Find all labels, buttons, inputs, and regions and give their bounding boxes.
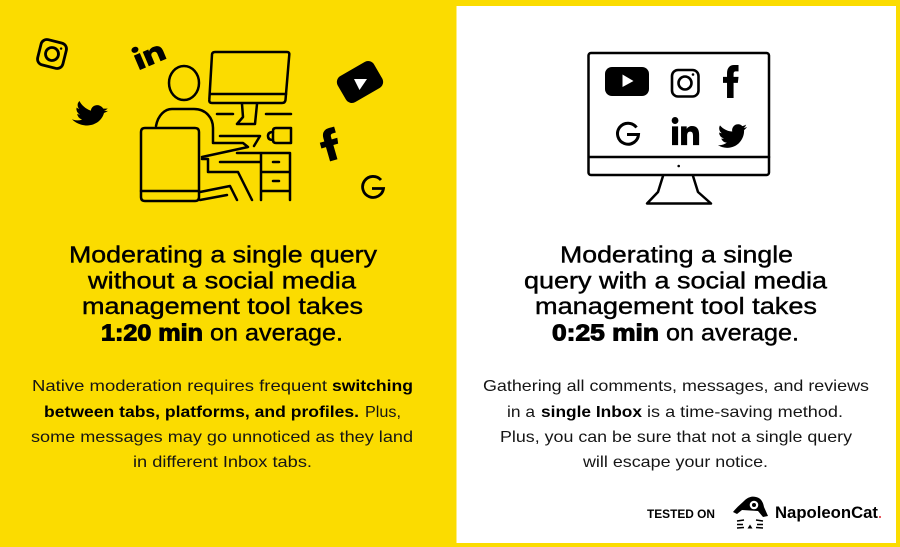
heading: without a tool: management tool takes	[82, 293, 363, 319]
text block: with a tool: in a	[507, 404, 535, 421]
text block: without a tool: Plus,	[365, 404, 401, 421]
icon: desktop monitor with social icons	[588, 53, 769, 204]
icon: facebook	[317, 127, 343, 163]
logo: NapoleonCat	[733, 497, 881, 528]
text block: with a tool: Gathering all comments, messages, and reviews	[483, 378, 869, 395]
heading: without a tool: without a social media	[87, 268, 356, 294]
text block: without a tool	[31, 378, 413, 471]
text block: without a tool: switching	[332, 378, 413, 395]
heading: with a tool: on average.	[666, 320, 799, 346]
text block: with a tool: will escape your notice.	[582, 454, 768, 471]
text block: with a tool: single Inbox	[541, 404, 642, 421]
heading: without a tool: on average.	[210, 320, 343, 346]
text block: without a tool: some messages may go unnoticed as they land	[31, 429, 413, 446]
heading: without a tool: Moderating a single query	[69, 242, 378, 268]
icon: google	[363, 176, 384, 197]
text block: without a tool: in different Inbox tabs.	[133, 454, 312, 471]
heading: with a tool: query with a social media	[524, 268, 827, 294]
heading: with a tool	[524, 242, 827, 346]
icon: twitter	[71, 99, 109, 131]
text block: without a tool: Native moderation requires frequent	[32, 378, 328, 395]
text block: with a tool: Plus, you can be sure that not a single query	[500, 429, 852, 446]
heading: without a tool: 1:20 min	[101, 320, 203, 346]
icon: youtube	[334, 59, 386, 105]
illustration: person working at a desk	[141, 52, 291, 201]
text block: with a tool	[483, 378, 869, 471]
heading: with a tool: Moderating a single	[560, 242, 793, 268]
heading: without a tool	[69, 242, 378, 346]
label: tested on: TESTED ON	[647, 507, 715, 521]
heading: with a tool: management tool takes	[535, 293, 817, 319]
logo: NapoleonCat: NapoleonCat	[775, 503, 878, 522]
text block: with a tool: is a time-saving method.	[647, 404, 843, 421]
heading: with a tool: 0:25 min	[552, 320, 659, 346]
icon: linkedin	[130, 37, 167, 70]
icon: instagram	[36, 38, 68, 70]
text block: without a tool: between tabs, platforms, and profiles.	[44, 404, 359, 421]
panel: with a tool	[456, 6, 896, 543]
